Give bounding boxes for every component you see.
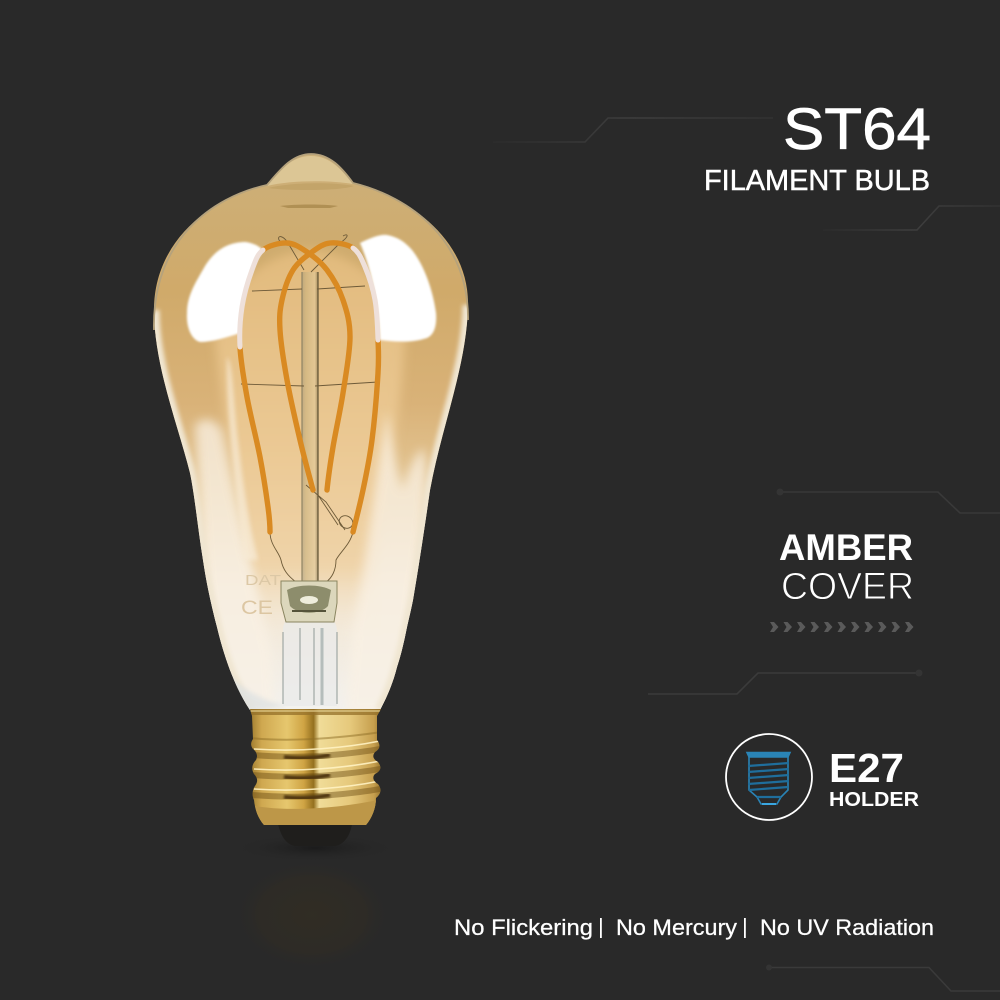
brass screw base — [250, 709, 381, 825]
circuit line decorations — [493, 118, 1000, 991]
amber cover label: COVER — [781, 566, 914, 608]
title: ST64 — [783, 97, 931, 162]
pale lower-left glass reflection — [190, 414, 260, 710]
feature list — [454, 915, 934, 940]
amber cover label — [779, 527, 914, 608]
feature list: No UV Radiation — [760, 915, 934, 940]
window reflection left — [187, 242, 263, 342]
feature list: No Flickering — [454, 915, 593, 940]
window reflection right — [360, 235, 436, 342]
E27 holder label: E27 — [829, 745, 904, 791]
E27 holder label: HOLDER — [829, 789, 920, 811]
icon: E27 socket — [726, 734, 812, 820]
glass envelope — [140, 150, 480, 715]
reflection under bulb — [230, 834, 400, 970]
faint print on glass — [241, 572, 281, 619]
black contact tip — [278, 824, 352, 846]
pale lower-right glass reflection — [356, 416, 430, 709]
support wires — [241, 235, 378, 582]
title: FILAMENT BULB — [704, 165, 930, 197]
E27 holder label — [829, 745, 920, 811]
infographic canvas — [153, 108, 1000, 992]
amber cover label: AMBER — [779, 527, 913, 568]
top nub — [267, 156, 353, 186]
chevron row — [770, 622, 914, 632]
spiral filament — [240, 243, 379, 532]
feature list: No Mercury — [616, 915, 737, 940]
glass pinch and exhaust tube — [281, 581, 337, 706]
support stem — [302, 272, 318, 582]
faint print on glass: DAT — [245, 572, 281, 589]
title — [704, 97, 931, 197]
glass rim outline — [154, 154, 468, 330]
pale edge of the glass — [154, 310, 250, 710]
bulb illustration — [140, 150, 480, 846]
faint print on glass: CE — [241, 598, 273, 619]
